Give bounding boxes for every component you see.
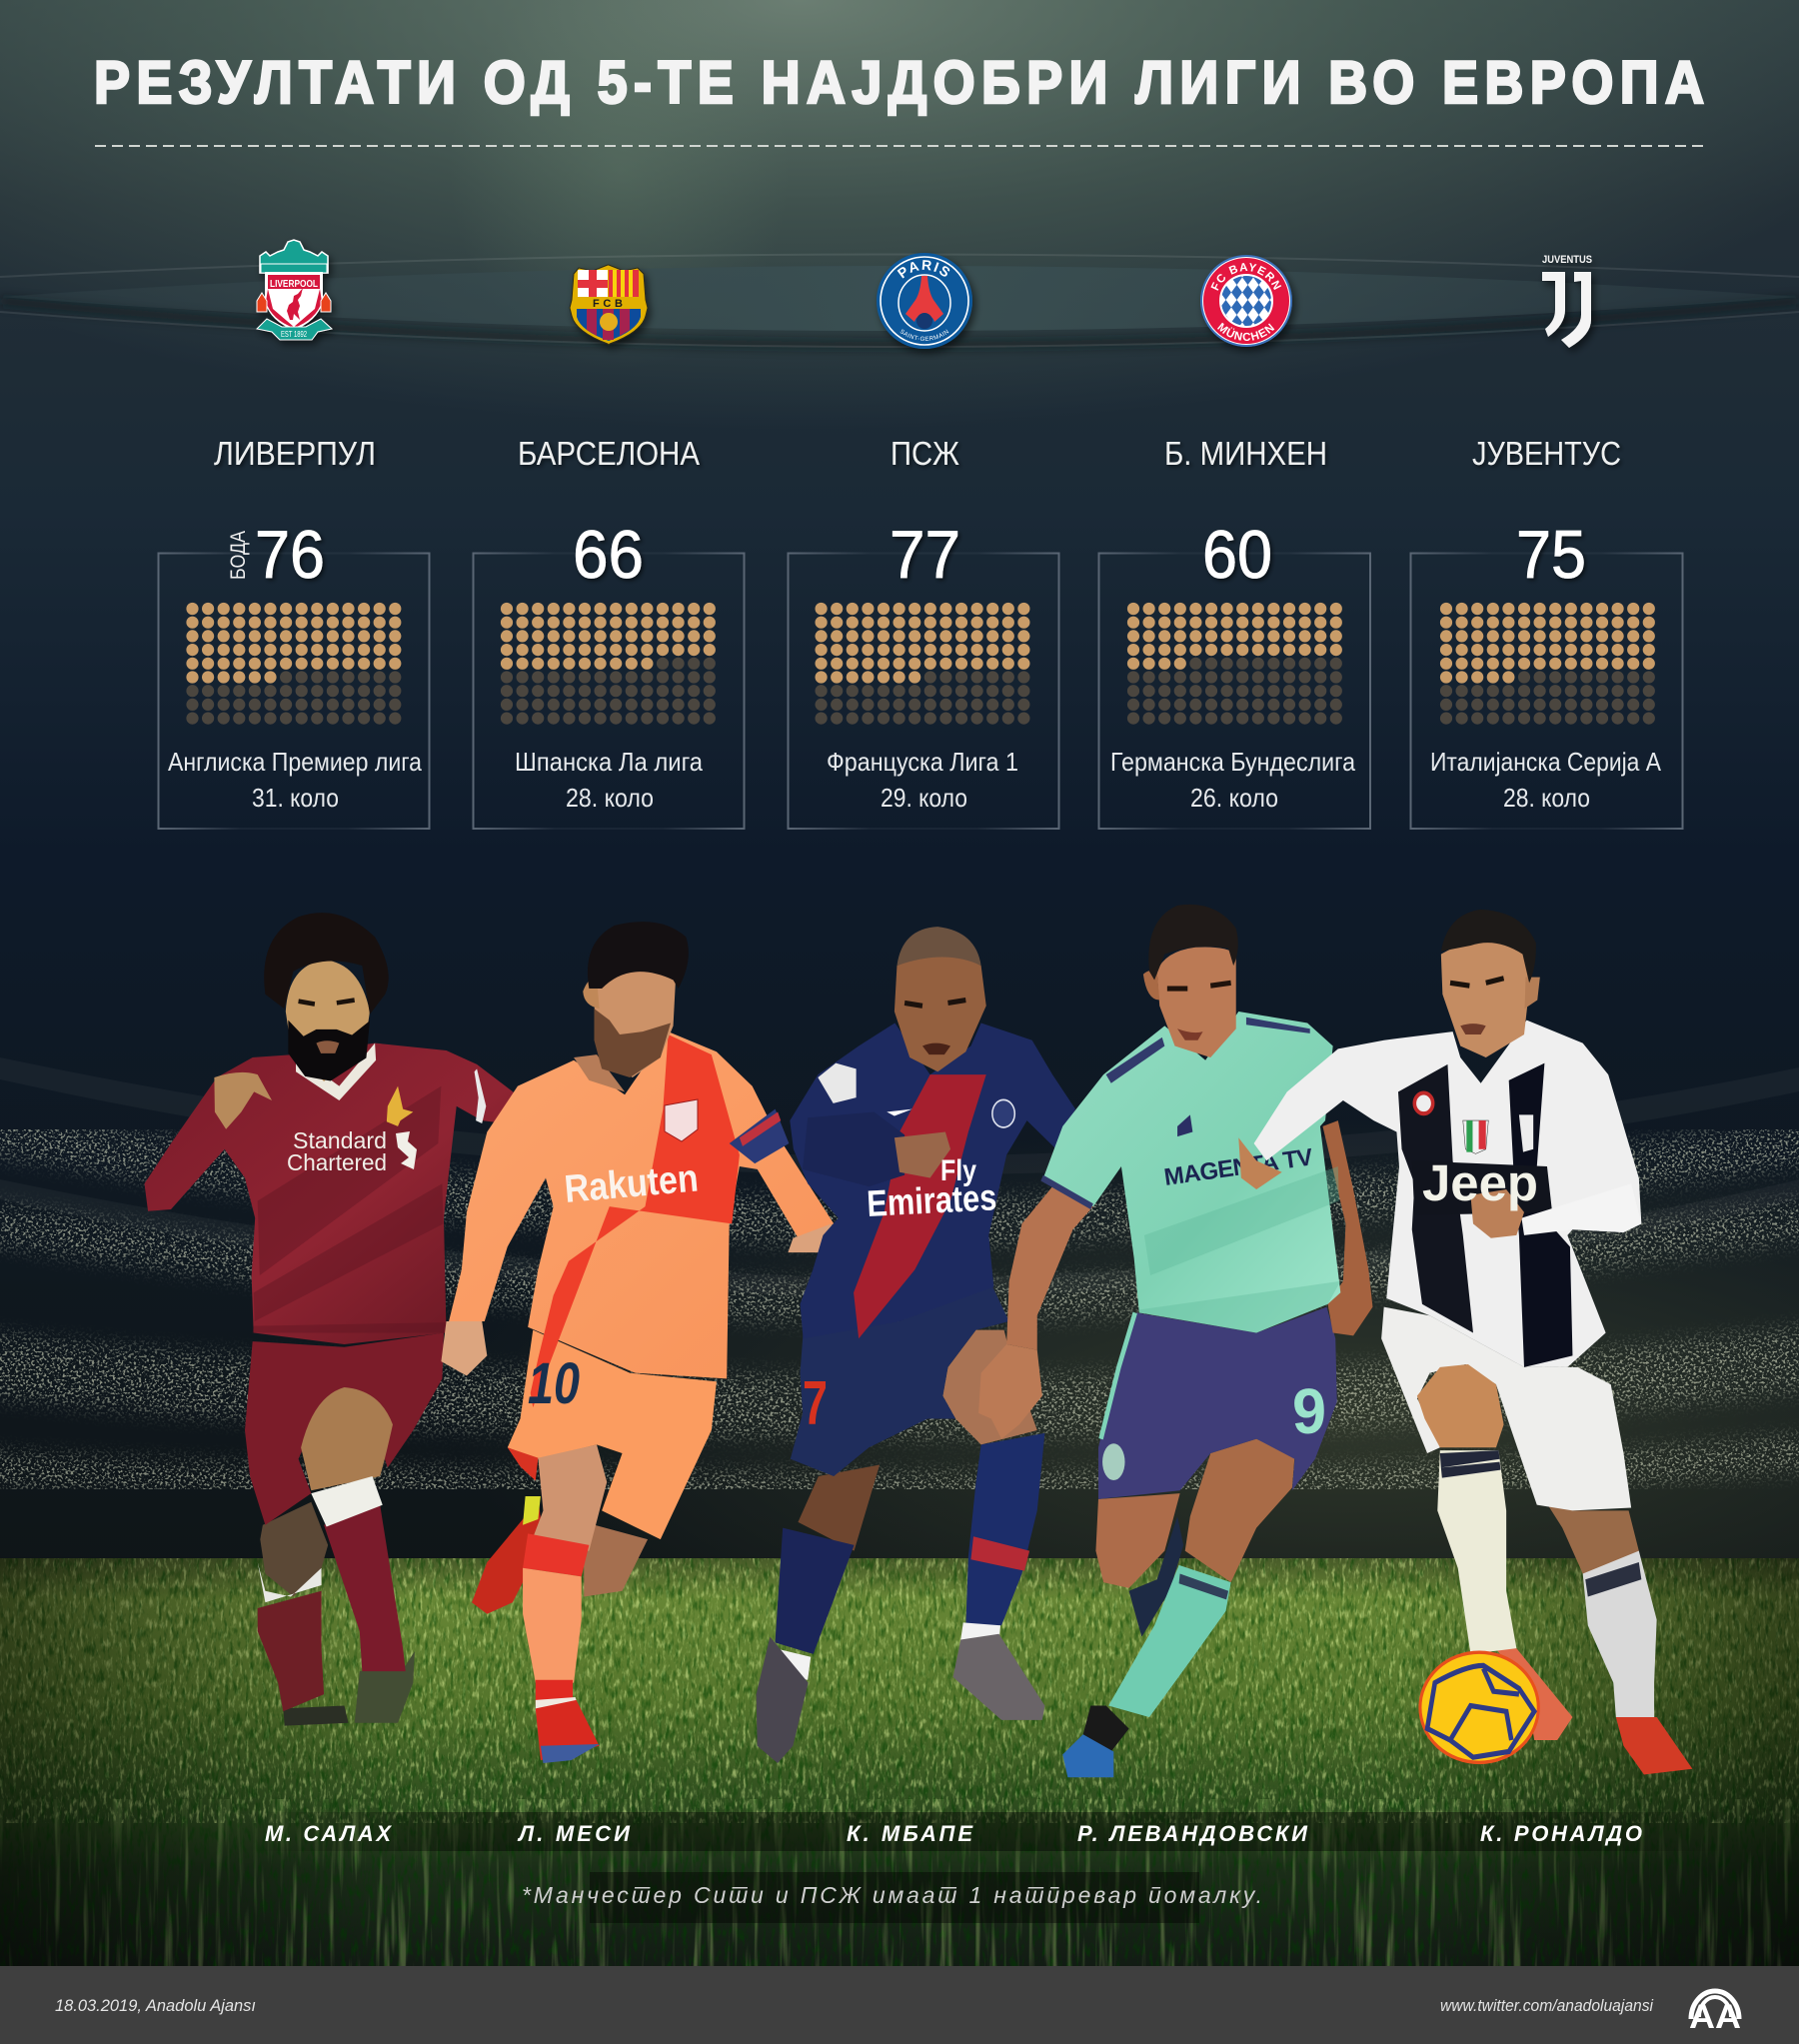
league text: 26. коло: [1190, 783, 1278, 813]
panel: Liverpool points: [158, 517, 430, 829]
club names: ЛИВЕРПУЛ: [214, 435, 376, 472]
sponsor text: Rakuten: [563, 1156, 700, 1211]
icon: PSG crest: SAINT-GERMAIN: [900, 330, 949, 341]
icon: Barcelona badge: [665, 1099, 698, 1141]
points value: 66: [573, 517, 644, 593]
league text: Италијанска Серија А: [1430, 747, 1662, 777]
shirt number: 7: [803, 1369, 828, 1438]
club names: ЈУВЕНТУС: [1472, 435, 1621, 472]
league text: 28. коло: [566, 783, 654, 813]
shirt number: 10: [528, 1351, 580, 1416]
background: stadium crowd stands: [0, 1057, 1799, 1489]
footnote: *Манчестер Сити и ПСЖ имаат 1 натпревар помалку.: [522, 1882, 1262, 1908]
icon: PSG crest: PARIS: [898, 260, 949, 278]
dot chart: 60 of 126: [1133, 609, 1336, 719]
club names: Б. МИНХЕН: [1164, 435, 1327, 472]
league text: [1110, 747, 1355, 813]
footnote: [522, 1872, 1262, 1923]
sponsor text: Jeep: [1422, 1154, 1538, 1211]
player: Messi: [441, 922, 867, 1763]
icon: Barcelona crest: [570, 265, 648, 345]
icon: Bayern crest: [1200, 255, 1298, 353]
date and source: 18.03.2019, Anadolu Ajansı: [55, 1996, 256, 2015]
panel: Bayern points: [1099, 517, 1370, 829]
player names: К. РОНАЛДО: [1480, 1821, 1642, 1846]
league text: Германска Бундеслига: [1110, 747, 1355, 777]
points value: 75: [1516, 517, 1586, 593]
points value: 76: [255, 517, 325, 593]
player names: М. САЛАХ: [265, 1821, 392, 1846]
sponsor text: [866, 1154, 997, 1224]
panel: Juventus points: [1411, 517, 1683, 829]
points value: 77: [890, 517, 960, 593]
title dashed divider: [95, 145, 1705, 147]
player names: [265, 1821, 1642, 1846]
player: Salah: [144, 913, 517, 1726]
league text: [827, 747, 1018, 813]
dot chart: 66 of 126: [507, 609, 710, 719]
crest ribbon band: [0, 254, 1799, 347]
title: РЕЗУЛТАТИ ОД 5-ТЕ НАЈДОБРИ ЛИГИ ВО ЕВРОПА: [94, 49, 1704, 117]
player names: К. МБАПЕ: [847, 1821, 973, 1846]
league text: [168, 747, 422, 813]
league text: Француска Лига 1: [827, 747, 1018, 777]
sponsor text: [287, 1127, 417, 1175]
player: Mbappe: [757, 927, 1075, 1763]
player: Lewandowski: [978, 905, 1372, 1777]
icon: Barcelona crest: FCB: [593, 298, 623, 310]
sponsor text: Chartered: [287, 1149, 387, 1175]
club names: [214, 435, 1621, 472]
icon: Bayern crest: FC BAYERN: [1211, 263, 1281, 291]
points label: БОДА: [227, 531, 250, 580]
panel: PSG points: [788, 517, 1059, 829]
sponsor text: Fly: [940, 1154, 976, 1187]
icon: Liverpool crest: EST 1892: [281, 330, 307, 339]
league text: 29. коло: [881, 783, 967, 813]
icon: Bayern crest: MÜNCHEN: [1217, 322, 1275, 341]
sponsor text: Emirates: [866, 1176, 997, 1224]
league text: [515, 747, 703, 813]
dot chart: 75 of 126: [1446, 609, 1649, 719]
points value: 60: [1202, 517, 1272, 593]
league text: Шпанска Ла лига: [515, 747, 703, 777]
sponsor text: MAGENTA TV: [1162, 1143, 1314, 1191]
dot chart: 76 of 126: [192, 609, 395, 719]
social link: www.twitter.com/anadoluajansi: [1440, 1996, 1654, 2015]
icon: PSG crest: [877, 253, 978, 356]
icon: Juventus crest: JUVENTUS: [1542, 254, 1592, 266]
club names: БАРСЕЛОНА: [518, 435, 700, 472]
icon: Liverpool crest: [257, 240, 332, 340]
player names: Л. МЕСИ: [517, 1821, 631, 1846]
icon: AA logo: AA: [1689, 1998, 1741, 2036]
league text: [1430, 747, 1662, 813]
icon: Liverpool crest: LIVERPOOL: [270, 279, 318, 290]
league text: Англиска Премиер лига: [168, 747, 422, 777]
player names: Р. ЛЕВАНДОВСКИ: [1077, 1821, 1308, 1846]
panel: Barcelona points: [474, 517, 744, 829]
icon: Juventus crest: [1542, 254, 1592, 348]
background: grass pitch: [0, 1558, 1799, 1966]
league text: 28. коло: [1503, 783, 1590, 813]
player: Ronaldo: [1238, 910, 1692, 1774]
shirt number: 9: [1292, 1375, 1326, 1447]
league text: 31. коло: [252, 783, 339, 813]
sponsor text: Standard: [293, 1127, 387, 1153]
club names: ПСЖ: [891, 435, 959, 472]
footer bar: [0, 1966, 1799, 2044]
dot chart: 77 of 126: [822, 609, 1023, 719]
name strip: [240, 1812, 1739, 1851]
